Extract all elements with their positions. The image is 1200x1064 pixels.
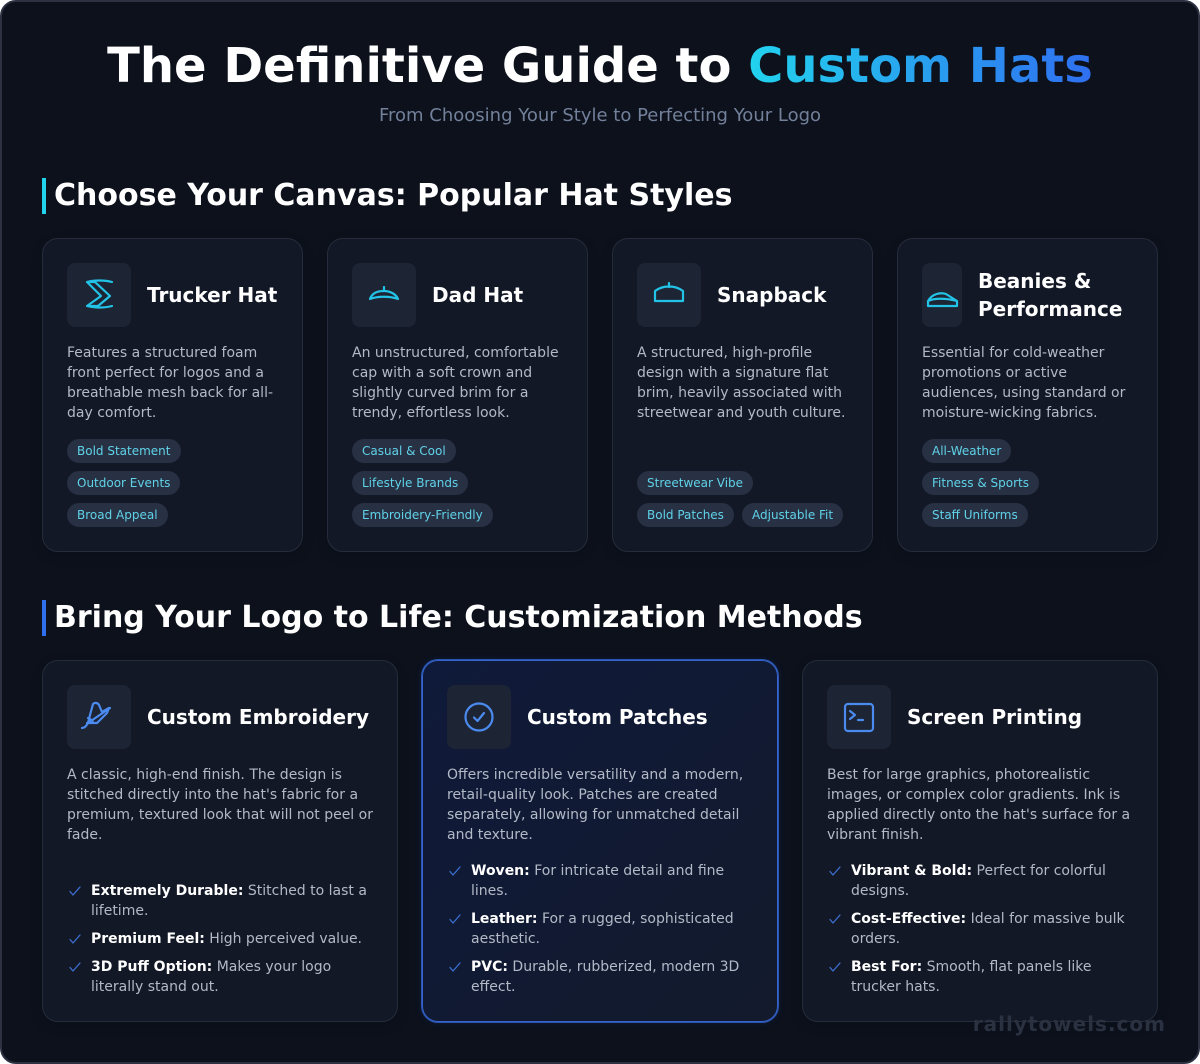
description: Best for large graphics, photorealistic: [827, 767, 1090, 783]
description: promotions or active: [922, 365, 1067, 381]
panel: trucker hat: [42, 238, 303, 552]
description: moisture-wicking fabrics.: [922, 405, 1098, 421]
panel: beanies and performance: [897, 238, 1158, 552]
card title: Dad Hat: [432, 283, 523, 307]
heading: hat styles: Choose Your Canvas: Popular Hat Styles: [54, 178, 732, 213]
card title: Screen Printing: [907, 705, 1082, 729]
icon: snapback: [637, 263, 701, 327]
list item: [449, 911, 734, 947]
icon: needle: [67, 685, 131, 749]
tag: Streetwear Vibe: [647, 476, 743, 490]
description: slightly curved brim for a: [352, 385, 528, 401]
subtitle: From Choosing Your Style to Perfecting Your Logo: [379, 105, 821, 126]
tag: [922, 471, 1039, 495]
tag: Casual & Cool: [362, 444, 446, 458]
list item: PVC: Durable, rubberized, modern 3D: [471, 959, 739, 975]
card title: Beanies &: [978, 269, 1091, 293]
description: [922, 345, 1126, 421]
list item: lifetime.: [91, 903, 148, 919]
description: Features a structured foam: [67, 345, 257, 361]
watermark: rallytowels.com: [973, 1012, 1166, 1036]
description: vibrant finish.: [827, 827, 923, 843]
tag: Outdoor Events: [77, 476, 170, 490]
tag: [637, 471, 753, 495]
icon: check circle: [447, 685, 511, 749]
tag: [637, 503, 734, 527]
icon: trucker hat: [67, 263, 131, 327]
tag: Fitness & Sports: [932, 476, 1029, 490]
card title: Performance: [978, 297, 1122, 321]
description: fade.: [67, 827, 102, 843]
tag: [742, 503, 843, 527]
description: applied directly onto the hat's surface for a: [827, 807, 1130, 823]
tag: Broad Appeal: [77, 508, 158, 522]
tag: Embroidery-Friendly: [362, 508, 483, 522]
list item: orders.: [851, 931, 900, 947]
tag: [67, 471, 180, 495]
card title: Custom Patches: [527, 705, 708, 729]
description: [827, 767, 1130, 843]
description: A classic, high-end finish. The design is: [67, 767, 342, 783]
tag: [352, 439, 456, 463]
title: The Definitive Guide to Custom Hats: [107, 38, 1093, 94]
tag: [352, 471, 468, 495]
list item: [829, 959, 1091, 995]
description: retail-quality look. Patches are created: [447, 787, 718, 803]
card title: Custom Embroidery: [147, 705, 369, 729]
description: and texture.: [447, 827, 533, 843]
description: [67, 345, 273, 421]
list item: Woven: For intricate detail and fine: [471, 863, 724, 879]
list item: [829, 863, 1106, 899]
card title: Trucker Hat: [147, 283, 277, 307]
description: [67, 767, 373, 843]
description: streetwear and youth culture.: [637, 405, 845, 421]
list item: Leather: For a rugged, sophisticated: [471, 911, 734, 927]
tag: [922, 439, 1011, 463]
list item: [829, 911, 1125, 947]
list item: designs.: [851, 883, 909, 899]
panel: dad hat: [327, 238, 588, 552]
description: [352, 345, 559, 421]
tag: All-Weather: [932, 444, 1001, 458]
tag: Lifestyle Brands: [362, 476, 458, 490]
tag: [67, 439, 180, 463]
description: images, or complex color gradients. Ink is: [827, 787, 1120, 803]
description: stitched directly into the hat's fabric for a: [67, 787, 358, 803]
icon: beanie: [922, 263, 962, 327]
description: cap with a soft crown and: [352, 365, 532, 381]
list item: 3D Puff Option: Makes your logo: [91, 959, 331, 975]
panel: snapback: [612, 238, 873, 552]
description: separately, allowing for unmatched detail: [447, 807, 739, 823]
list item: Premium Feel: High perceived value.: [91, 931, 362, 947]
list item: literally stand out.: [91, 979, 219, 995]
description: front perfect for logos and a: [67, 365, 264, 381]
description: design with a signature flat: [637, 365, 828, 381]
icon: dad hat: [352, 263, 416, 327]
list item: effect.: [471, 979, 516, 995]
description: trendy, effortless look.: [352, 405, 510, 421]
tag: Bold Statement: [77, 444, 170, 458]
description: breathable mesh back for all-: [67, 385, 273, 401]
description: A structured, high-profile: [637, 345, 812, 361]
list item: [449, 959, 739, 995]
list item: [69, 883, 367, 919]
tag: Adjustable Fit: [752, 508, 833, 522]
panel: custom embroidery: [42, 660, 398, 1022]
list item: trucker hats.: [851, 979, 940, 995]
list item: [449, 863, 724, 899]
tag: Bold Patches: [647, 508, 724, 522]
list item: Extremely Durable: Stitched to last a: [91, 883, 367, 899]
tag: [352, 503, 493, 527]
tag: [67, 503, 168, 527]
description: day comfort.: [67, 405, 156, 421]
list item: Best For: Smooth, flat panels like: [851, 959, 1091, 975]
panel: custom patches: [422, 660, 778, 1022]
list item: Vibrant & Bold: Perfect for colorful: [851, 863, 1106, 879]
description: Offers incredible versatility and a modern,: [447, 767, 743, 783]
card title: [978, 269, 1122, 321]
description: [447, 767, 743, 843]
card title: Snapback: [717, 283, 826, 307]
description: premium, textured look that will not peel or: [67, 807, 373, 823]
tag: [922, 503, 1028, 527]
description: audiences, using standard or: [922, 385, 1125, 401]
list item: Cost-Effective: Ideal for massive bulk: [851, 911, 1125, 927]
tag: Staff Uniforms: [932, 508, 1018, 522]
description: brim, heavily associated with: [637, 385, 842, 401]
list item: lines.: [471, 883, 508, 899]
description: Essential for cold-weather: [922, 345, 1104, 361]
heading: customization methods: Bring Your Logo to Life: Customization Methods: [54, 600, 863, 635]
icon: terminal: [827, 685, 891, 749]
panel: screen printing: [802, 660, 1158, 1022]
description: [637, 345, 845, 421]
list item: aesthetic.: [471, 931, 540, 947]
list item: [69, 959, 331, 995]
description: An unstructured, comfortable: [352, 345, 559, 361]
